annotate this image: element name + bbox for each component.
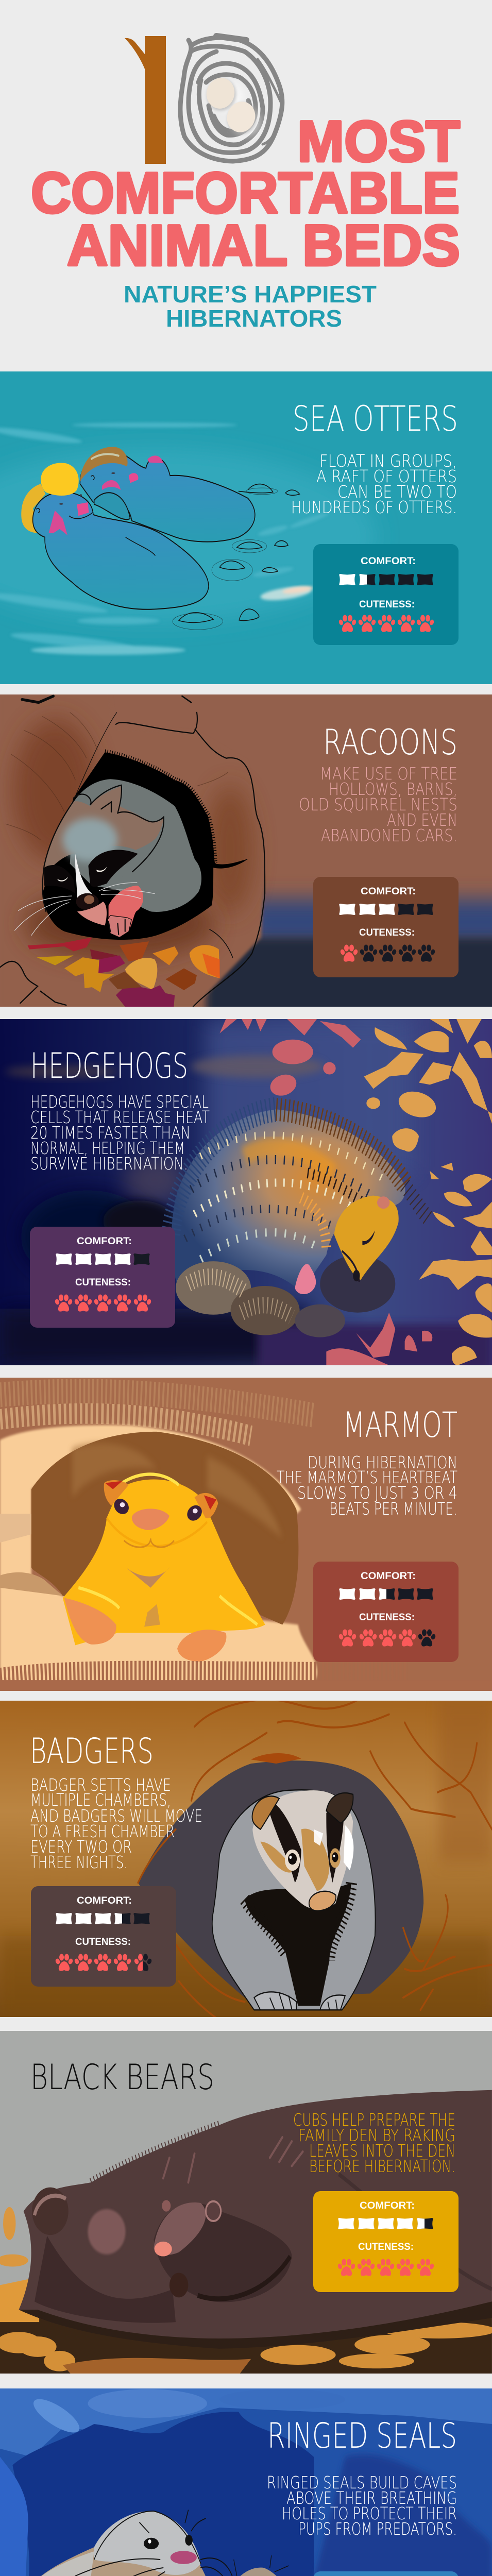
text block: [277, 1452, 457, 1519]
illustration: two sea otters: [21, 447, 300, 630]
text block: HUNDREDS OF OTTERS.: [291, 497, 457, 517]
text block: [293, 2110, 455, 2176]
head: [334, 1196, 399, 1280]
text block: SLOWS TO JUST 3 OR 4: [297, 1483, 457, 1503]
panel: racoons: [0, 694, 492, 1007]
rating card: CUTENESS:: [359, 927, 415, 938]
text block: THREE NIGHTS.: [30, 1852, 128, 1872]
title: MOST: [297, 109, 460, 174]
text block: 20 TIMES FASTER THAN: [30, 1123, 191, 1143]
text block: FLOAT IN GROUPS,: [319, 451, 457, 471]
text block: MAKE USE OF TREE: [320, 764, 457, 784]
text block: [267, 2472, 457, 2539]
illustration: hedgehog: [171, 1019, 492, 1365]
text block: CELLS THAT RELEASE HEAT: [30, 1107, 210, 1127]
text block: [30, 1775, 202, 1872]
illustration: marmot in burrow: [0, 1391, 492, 1691]
panel: marmot: [0, 1378, 492, 1691]
cuteness paws: [55, 1954, 152, 1971]
face: [112, 1496, 130, 1517]
cuteness paws: [338, 1629, 436, 1647]
rating card: [313, 544, 459, 645]
text block: [30, 1092, 210, 1174]
text block: TO A FRESH CHAMBER: [30, 1821, 175, 1841]
panel: black bears: [0, 2031, 492, 2374]
text block: HEDGEHOGS HAVE SPECIAL: [30, 1092, 209, 1112]
background brushwork: [0, 1019, 492, 1370]
heading: HEDGEHOGS: [30, 1046, 188, 1087]
text block: BADGER SETTS HAVE: [30, 1775, 171, 1795]
rating card: CUTENESS:: [358, 2242, 414, 2252]
comfort pillows: [56, 1913, 150, 1924]
subtitle: HIBERNATORS: [166, 305, 342, 332]
night sky band: [206, 899, 492, 1025]
badger body: [212, 1790, 375, 2010]
comfort pillows: [339, 904, 433, 915]
rating card: COMFORT:: [77, 1236, 132, 1247]
cuteness paws: [54, 1294, 152, 1312]
text block: CAN BE TWO TO: [337, 482, 457, 502]
ear and head: [32, 2188, 69, 2235]
text block: [291, 451, 457, 517]
text block: FAMILY DEN BY RAKING: [298, 2125, 455, 2145]
text block: HOLLOWS, BARNS,: [329, 779, 457, 799]
panel: badgers: [0, 1701, 492, 2017]
small seal: [219, 2568, 317, 2576]
rating card: CUTENESS:: [75, 1277, 131, 1288]
marmot body: [63, 1479, 265, 1645]
text block: AND BADGERS WILL MOVE: [30, 1806, 202, 1826]
comfort pillows: [338, 2218, 433, 2229]
cuteness paws: [340, 945, 436, 962]
mottled bank: [0, 1391, 314, 1436]
text block: OLD SQUIRREL NESTS: [299, 794, 457, 815]
illustration: seals in snow cave: [0, 2388, 492, 2576]
paws: [64, 1598, 116, 1645]
rating card: [31, 1886, 176, 1987]
text block: SURVIVE HIBERNATION.: [30, 1154, 188, 1174]
text block: AND EVEN: [387, 810, 457, 830]
icon: orange leaves: [364, 1019, 492, 1365]
badger paws: [254, 1992, 345, 2010]
title: COMFORTABLE: [31, 161, 460, 225]
rating card: [313, 877, 459, 977]
rating card: COMFORT:: [360, 2200, 415, 2211]
rating card: COMFORT:: [361, 556, 416, 567]
icon: number one made of a branch: [125, 36, 166, 164]
cuteness paws: [338, 615, 435, 632]
rating card: COMFORT:: [361, 1571, 416, 1582]
icon: nest with two eggs as number zero: [180, 36, 282, 161]
header: [31, 33, 461, 332]
subtitle: [124, 281, 377, 332]
icon: coral leaves: [219, 1019, 432, 1365]
rating card: [30, 1227, 175, 1328]
text block: DURING HIBERNATION: [308, 1452, 457, 1472]
heading: BADGERS: [30, 1731, 154, 1772]
feet and belly: [176, 1255, 395, 1337]
text block: ABANDONED CARS.: [321, 825, 457, 845]
heading: BLACK BEARS: [30, 2057, 214, 2098]
title: ANIMAL BEDS: [67, 213, 460, 278]
panel: hedgehogs: [0, 1019, 492, 1365]
rating card: [313, 1562, 459, 1662]
illustration: racoon in tree hollow: [0, 694, 265, 1007]
panel: ringed seals: [0, 2388, 492, 2576]
text block: [299, 764, 457, 845]
subtitle: NATURE’S HAPPIEST: [124, 281, 377, 308]
rating card: [313, 2191, 459, 2292]
comfort pillows: [339, 574, 433, 585]
water wisps: [0, 422, 376, 655]
comfort pillows: [339, 1588, 433, 1600]
text block: MULTIPLE CHAMBERS,: [30, 1790, 171, 1810]
panel: sea otters: [0, 371, 492, 684]
big seal: [12, 2511, 217, 2576]
rating card: [313, 2571, 459, 2576]
cuteness paws: [337, 2259, 435, 2276]
badger face: [252, 1790, 353, 1909]
illustration: bear and cub: [0, 2090, 492, 2376]
rating card: CUTENESS:: [359, 1612, 415, 1623]
comfort pillows: [56, 1253, 150, 1265]
illustration: badger in sett: [0, 1698, 492, 2020]
spiny body: [172, 1109, 405, 1292]
rating card: CUTENESS:: [75, 1937, 131, 1947]
rating card: COMFORT:: [77, 1895, 132, 1906]
text block: A RAFT OF OTTERS: [316, 466, 457, 486]
text block: EVERY TWO OR: [30, 1837, 132, 1857]
rating card: COMFORT:: [361, 886, 416, 897]
text block: NORMAL, HELPING THEM: [30, 1138, 185, 1158]
rating card: CUTENESS:: [359, 599, 415, 610]
ears: [104, 1480, 129, 1505]
cub: [154, 2203, 292, 2302]
title: [31, 109, 460, 278]
